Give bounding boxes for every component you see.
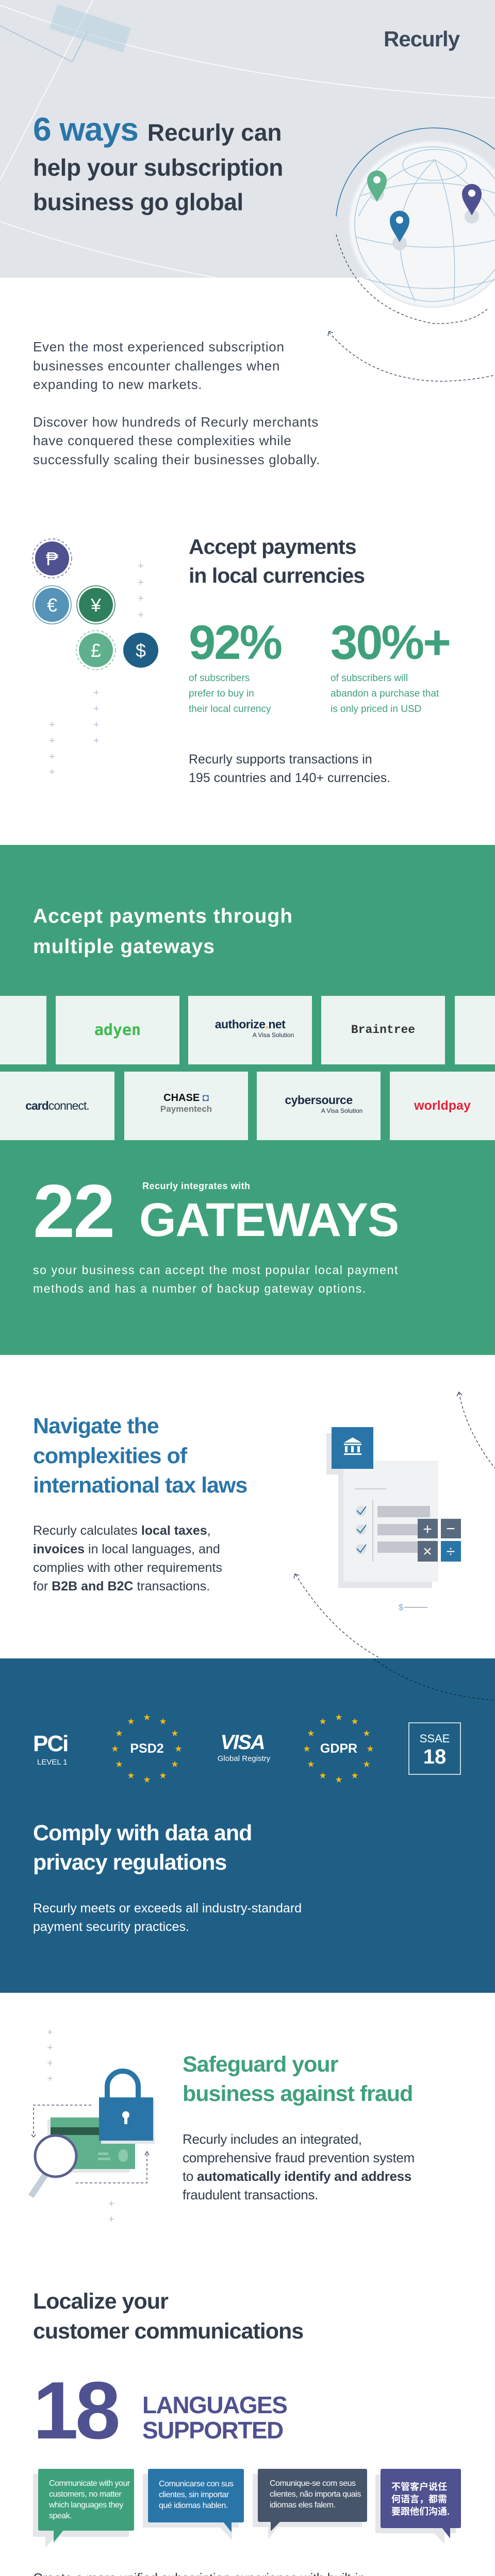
text: tax description: Recurly calculates local taxes, [33,1523,211,1538]
gateway logos grid: worldpay [414,1098,471,1113]
compliance badges: ★ [143,1775,151,1785]
heading: safeguard against fraud: business against fraud [183,2081,412,2106]
gateway logos grid: Braintree [351,1023,415,1037]
text: tax description: invoices in local languages, and [33,1542,220,1556]
speech bubbles [33,2469,461,2548]
compliance badges: ★ [171,1759,179,1770]
icon: currency coins: ₱ [46,548,58,569]
compliance badges: ★ [335,1775,343,1785]
icon: fraud lock card magnifier: + [47,2058,53,2069]
heading: gateways: multiple gateways [33,936,215,958]
stat: 22 gateways: Recurly integrates with [142,1181,251,1191]
icon: currency coins [32,538,158,778]
stat: 18 languages: 18 [33,2365,118,2456]
logo: Recurly: Recurly [384,27,459,51]
bubble text: english: Communicate with your customers, no matter which languages they speak. [49,2479,130,2520]
heading: accept payments in local currencies: Accept payments [189,535,356,558]
panel: gateways [0,845,495,1355]
compliance badges: GDPR [320,1741,357,1756]
heading: localize communications: Localize your [33,2289,168,2314]
text: tax description: for B2B and B2C transactions. [33,1579,210,1594]
icon: currency coins: + [93,719,100,731]
stat: 18 languages: LANGUAGES [142,2392,287,2418]
icon: globe with location pins [336,128,495,324]
stat: 18 languages: SUPPORTED [142,2417,283,2444]
heading: tax laws: international tax laws [33,1473,247,1498]
gateway logos grid: cardconnect. [25,1099,89,1112]
text: countries and currencies: Recurly supports transactions in [189,752,372,767]
compliance badges: ★ [143,1713,151,1723]
text: gateways description [33,1263,399,1295]
heading: safeguard against fraud [183,2052,412,2106]
title: 6 ways Recurly can [33,111,282,148]
icon: tax document with calculator: × [423,1543,432,1560]
stat: 22 gateways: GATEWAYS [139,1194,399,1246]
heading: tax laws: Navigate the [33,1414,159,1438]
icon: currency coins: + [93,687,100,699]
text: compliance description [33,1901,302,1934]
heading: localize communications [33,2289,303,2344]
gateway logos grid: CHASE ◘ [163,1092,209,1104]
text: fraud description: Recurly includes an integrated, [183,2131,362,2147]
icon: currency coins: + [138,609,144,621]
stat: 92% [189,615,282,715]
compliance badges: ★ [171,1728,179,1739]
compliance badges: PSD2 [130,1741,164,1756]
heading: gateways [33,905,293,958]
icon: currency coins: + [138,577,144,588]
text: countries and currencies: 195 countries and 140+ currencies. [189,771,390,785]
compliance badges: ★ [174,1744,183,1754]
compliance badges: ★ [307,1759,315,1770]
intro text: successfully scaling their businesses globally. [33,451,320,467]
heading: data and privacy [33,1821,252,1875]
stat: 30%+: of subscribers will [331,673,408,684]
compliance badges: ★ [351,1717,359,1727]
intro text: Discover how hundreds of Recurly merchants [33,414,319,430]
intro text: businesses encounter challenges when [33,358,280,373]
title: help your subscription [33,154,283,181]
stat: 30%+: 30%+ [331,615,450,669]
text: compliance description: payment security practices. [33,1920,189,1934]
gateway logos grid: adyen [94,1021,141,1039]
icon: fraud lock card magnifier: + [47,2027,53,2038]
icon: fraud lock card magnifier: + [47,2073,53,2084]
bubble text: chinese: 不管客户说任何语言，都需要跟他们沟通. [391,2482,450,2517]
stat: 30%+ [331,615,450,715]
text: fraud description: fraudulent transactions. [183,2187,318,2202]
compliance badges: ★ [307,1728,315,1739]
stat: 92%: of subscribers [189,673,250,684]
heading: tax laws: complexities of [33,1444,187,1468]
compliance badges: Global Registry [218,1754,271,1763]
intro text: Even the most experienced subscription [33,339,285,354]
stat: 92%: 92% [189,615,281,669]
title [33,111,283,215]
header decorative lines [0,0,495,278]
text: tax description [33,1523,222,1594]
icon: fraud lock card magnifier: + [108,2198,114,2210]
gateway logos grid: authorize.net [215,1018,285,1031]
heading: data and privacy: Comply with data and [33,1821,252,1845]
icon: tax document with calculator: − [446,1520,455,1537]
intro text: have conquered these complexities while [33,433,291,448]
stat: 22 gateways [33,1169,399,1253]
icon: currency coins: + [49,751,55,762]
icon: fraud lock card magnifier [28,2027,155,2225]
icon: currency coins: ¥ [90,595,102,616]
icon: currency coins: + [138,593,144,604]
compliance badges: ★ [351,1771,359,1781]
compliance badges: ★ [319,1771,327,1781]
compliance badges: LEVEL 1 [37,1758,68,1767]
intro text: expanding to new markets. [33,377,202,392]
text: fraud description: to automatically identify and address [183,2168,411,2184]
header background [0,0,495,278]
bubble text: spanish: Comunicarse con sus clientes, sin importar qué idiomas hablen. [159,2480,233,2510]
compliance badges: PCi [33,1731,68,1756]
stat: 92%: their local currency [189,704,271,715]
icon: currency coins: £ [91,640,101,661]
compliance badges: ★ [362,1759,371,1770]
heading: accept payments in local currencies [189,535,365,587]
stat: 92%: prefer to buy in [189,688,254,699]
text: fraud description: comprehensive fraud prevention system [183,2150,415,2165]
icon: fraud lock card magnifier: + [47,2042,53,2054]
icon: currency coins: + [93,703,100,715]
compliance badges: ★ [366,1744,374,1754]
heading: localize communications: customer communications [33,2319,303,2344]
heading: gateways: Accept payments through [33,905,293,927]
compliance badges: ★ [115,1759,123,1770]
dashed arrow: intro [327,331,493,382]
dashed arrow: tax to compliance [373,1659,493,1700]
icon: currency coins: + [49,767,55,778]
panel: compliance [0,1658,495,1993]
text: gateways description: methods and has a number of backup gateway options. [33,1282,367,1295]
gateway logos grid: cybersource [285,1093,353,1107]
icon: currency coins: $ [136,640,146,661]
icon: fraud lock card magnifier: + [108,2214,114,2225]
text: compliance description: Recurly meets or exceeds all industry-standard [33,1901,302,1916]
icon: tax document with calculator [293,1391,495,1658]
stat: 22 gateways: 22 [33,1169,113,1253]
icon: tax document with calculator: + [423,1521,432,1538]
heading: accept payments in local currencies: in local currencies [189,564,365,587]
compliance badges: ★ [127,1717,135,1727]
icon: tax document with calculator: ÷ [447,1543,455,1560]
icon: currency coins: + [138,561,144,572]
title: business go global [33,189,243,215]
compliance badges: VISA [220,1731,265,1754]
icon: currency coins: € [47,595,57,616]
text: gateways description: so your business can accept the most popular local payment [33,1263,399,1277]
compliance badges: ★ [335,1713,343,1723]
stat: 30%+: is only priced in USD [331,704,421,715]
heading: safeguard against fraud: Safeguard your [183,2052,338,2077]
compliance badges: ★ [127,1771,135,1781]
heading: tax laws [33,1414,247,1498]
compliance badges: SSAE [420,1732,450,1745]
gateway logos grid: A Visa Solution [321,1107,362,1114]
gateway logos grid [0,996,495,1140]
compliance badges: ★ [362,1728,371,1739]
compliance badges: 18 [423,1745,446,1768]
intro text [33,339,320,467]
gateway logos grid: Paymentech [160,1104,212,1114]
heading: data and privacy: privacy regulations [33,1850,226,1875]
text: countries and currencies [189,752,390,785]
compliance badges [33,1713,461,1785]
compliance badges: ★ [159,1717,167,1727]
compliance badges: ★ [159,1771,167,1781]
icon: tax document with calculator: $ [399,1603,403,1612]
icon: currency coins: + [49,719,55,731]
stat: 30%+: abandon a purchase that [331,688,439,699]
compliance badges: ★ [111,1744,119,1754]
icon: currency coins: + [49,735,55,747]
bubble text: portuguese: Comunique-se com seus clientes, não importa quais idiomas eles falem. [270,2479,361,2510]
gateway logos grid: A Visa Solution [253,1031,294,1039]
stat: 18 languages [33,2365,287,2456]
text: fraud description [183,2131,415,2202]
icon: currency coins: + [93,735,100,747]
compliance badges: ★ [115,1728,123,1739]
compliance badges: ★ [303,1744,311,1754]
text: tax description: complies with other requirements [33,1561,222,1575]
compliance badges: ★ [319,1717,327,1727]
